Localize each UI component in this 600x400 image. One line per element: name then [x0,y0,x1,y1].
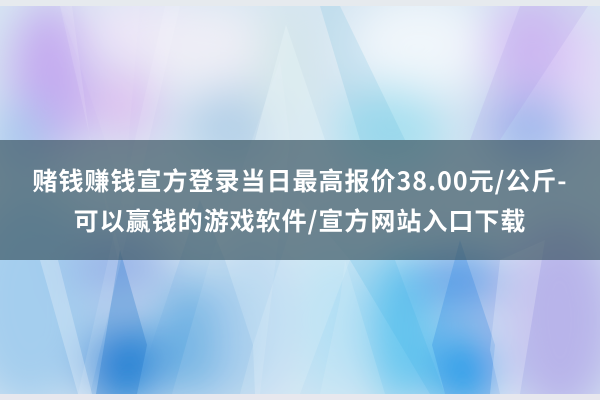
dark title band [0,140,600,260]
title line 2: 可以赢钱的游戏软件/宣方网站入口下载 [74,202,526,238]
title line 1: 赌钱赚钱宣方登录当日最高报价38.00元/公斤- [32,162,568,198]
